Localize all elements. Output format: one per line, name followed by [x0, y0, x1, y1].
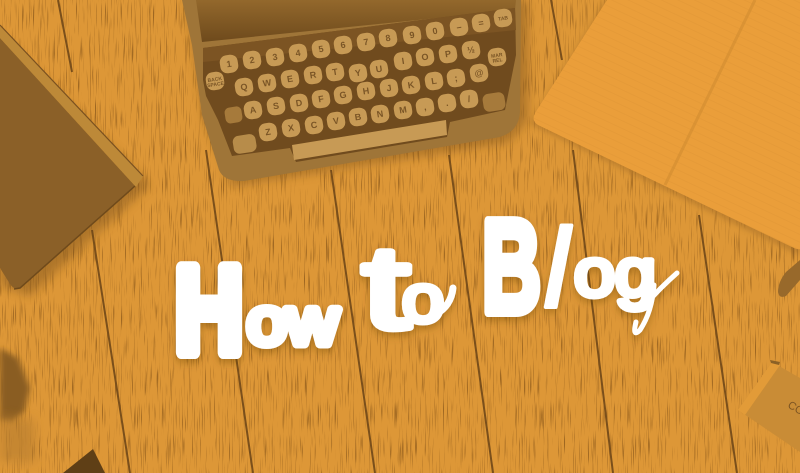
keys: / [467, 94, 472, 104]
title: How to Blog [175, 193, 677, 378]
typewriter body [182, 0, 521, 181]
pine cone [0, 348, 36, 462]
keys: 7 [363, 37, 369, 47]
keys: N [376, 109, 384, 119]
keys: C [310, 119, 318, 130]
keyboard well [203, 8, 516, 162]
keys: BACK [207, 76, 223, 84]
keys: H [362, 86, 370, 96]
keys: . [445, 98, 449, 108]
keys: G [339, 90, 347, 100]
keys: @ [474, 67, 484, 79]
keys: 0 [432, 26, 438, 36]
keys: R [309, 69, 317, 80]
keys: L [431, 76, 438, 86]
word: How: ow [247, 284, 338, 358]
keys: 1 [226, 59, 232, 69]
keys: 6 [340, 40, 346, 50]
word: Blog: og [574, 235, 656, 311]
keys: U [375, 64, 383, 74]
keys: ; [454, 73, 458, 83]
notebook [530, 0, 800, 256]
swash on o [436, 288, 453, 314]
keys: SPACE [207, 81, 225, 89]
keys: 5 [318, 44, 324, 54]
keys: W [262, 77, 272, 89]
word: to: o [402, 261, 444, 337]
keys: I [401, 56, 405, 66]
keys: F [318, 94, 325, 104]
keys: – [456, 22, 462, 32]
keys: B [354, 111, 362, 122]
keys: ½ [467, 44, 476, 56]
keys: TAB [498, 15, 509, 23]
keys: 9 [409, 30, 415, 40]
keys: 4 [295, 48, 301, 58]
keys: P [444, 49, 452, 59]
book [0, 25, 150, 296]
keys: MAR [491, 52, 503, 60]
typewriter [182, 0, 528, 186]
keys: REL [492, 57, 503, 65]
keys: 8 [385, 33, 391, 43]
keys [205, 8, 513, 155]
keys: D [295, 97, 303, 108]
keys: M [399, 104, 407, 116]
keys: O [421, 52, 429, 62]
word: Blog: B [482, 193, 541, 340]
typewriter shadow [186, 0, 528, 186]
word: Blog: l [544, 206, 572, 331]
keys: E [286, 74, 294, 84]
keys: V [332, 116, 340, 126]
keys: A [249, 104, 257, 115]
keys: Q [240, 82, 248, 92]
metal object at bottom [63, 449, 105, 473]
word: How: H [175, 242, 243, 378]
swash on g [635, 273, 677, 333]
keys: , [423, 102, 427, 112]
keys: Y [354, 68, 362, 78]
keys: J [386, 83, 392, 93]
keys: T [332, 67, 339, 77]
keys: = [478, 18, 484, 28]
pencil [778, 260, 800, 297]
keys: Z [265, 127, 272, 137]
eraser box [738, 360, 800, 452]
keys: K [407, 79, 415, 90]
keys: 2 [249, 55, 255, 65]
spacebar [292, 120, 447, 160]
typewriter carriage [196, 0, 516, 42]
keys: 3 [272, 52, 278, 62]
keys: S [272, 101, 280, 111]
word: to: t [362, 222, 410, 354]
keys: X [287, 123, 295, 133]
